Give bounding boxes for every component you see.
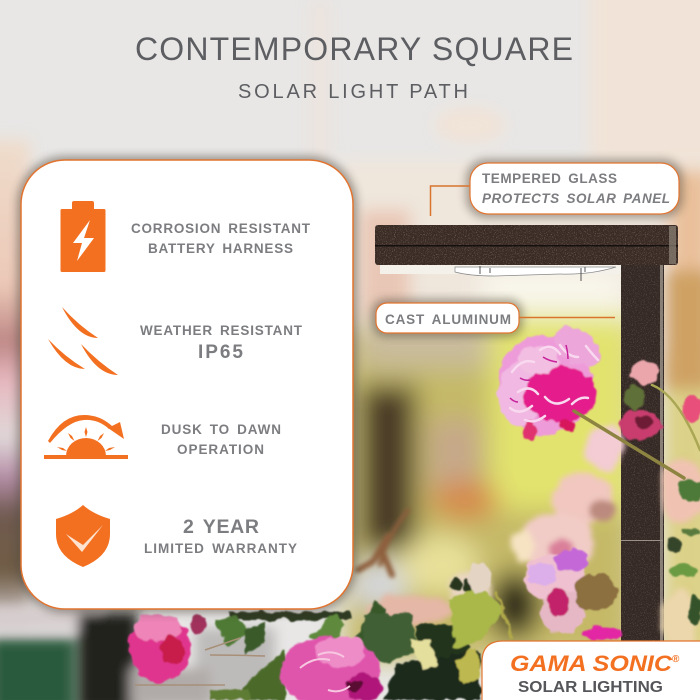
pink flower bottom left <box>129 614 206 682</box>
pink blossoms at centre <box>525 548 622 642</box>
subtitle: SOLAR LIGHT PATH <box>238 81 468 103</box>
feature: warranty <box>56 505 297 567</box>
callout: cast aluminum: CAST ALUMINUM <box>385 312 511 327</box>
text: IP65: IP65 <box>198 342 243 363</box>
panel: features <box>17 156 357 613</box>
foreground foliage bottom <box>210 564 512 700</box>
text: battery harness: BATTERY HARNESS <box>148 241 293 256</box>
icon: battery <box>60 201 106 272</box>
flowers on post <box>619 360 700 440</box>
callout: tempered glass: PROTECTS SOLAR PANEL <box>482 191 670 206</box>
tagline: SOLAR LIGHTING <box>518 679 663 696</box>
callout: cast aluminum <box>372 299 615 337</box>
dried flower <box>358 510 408 575</box>
blurred background blossoms <box>368 424 700 650</box>
solar path light fixture <box>375 225 678 642</box>
bottom-left dark band <box>0 606 275 700</box>
brand name: GAMA SONIC <box>510 651 673 676</box>
text: 2 year: 2 YEAR <box>183 516 259 538</box>
flower stems <box>574 385 700 478</box>
icon: rain drops <box>48 307 118 375</box>
text: operation: OPERATION <box>177 442 264 457</box>
light underside <box>380 264 624 281</box>
logo badge <box>482 641 700 700</box>
text: weather resistant: WEATHER RESISTANT <box>140 323 303 338</box>
text: dusk to dawn: DUSK TO DAWN <box>161 422 281 437</box>
flowers and foliage <box>129 319 700 700</box>
text: limited warranty: LIMITED WARRANTY <box>144 541 297 556</box>
post <box>621 264 664 642</box>
feature: battery harness <box>60 201 311 272</box>
lamp head <box>375 225 678 265</box>
title: CONTEMPORARY SQUARE <box>135 31 573 67</box>
icon: sun with arc arrow <box>44 415 128 459</box>
feature: dusk to dawn <box>44 415 281 459</box>
icon: shield with check <box>56 505 110 567</box>
feature: weather resistant <box>48 307 303 375</box>
text: corrosion resistant: CORROSION RESISTANT <box>131 221 311 236</box>
stems near bottom <box>135 638 265 685</box>
main pink geranium <box>498 319 608 441</box>
registered mark: ® <box>672 654 680 665</box>
pink flower bottom centre <box>280 636 383 700</box>
callout: tempered glass <box>430 159 683 218</box>
leaves on right <box>668 478 700 626</box>
callout: tempered glass: TEMPERED GLASS <box>482 171 617 186</box>
